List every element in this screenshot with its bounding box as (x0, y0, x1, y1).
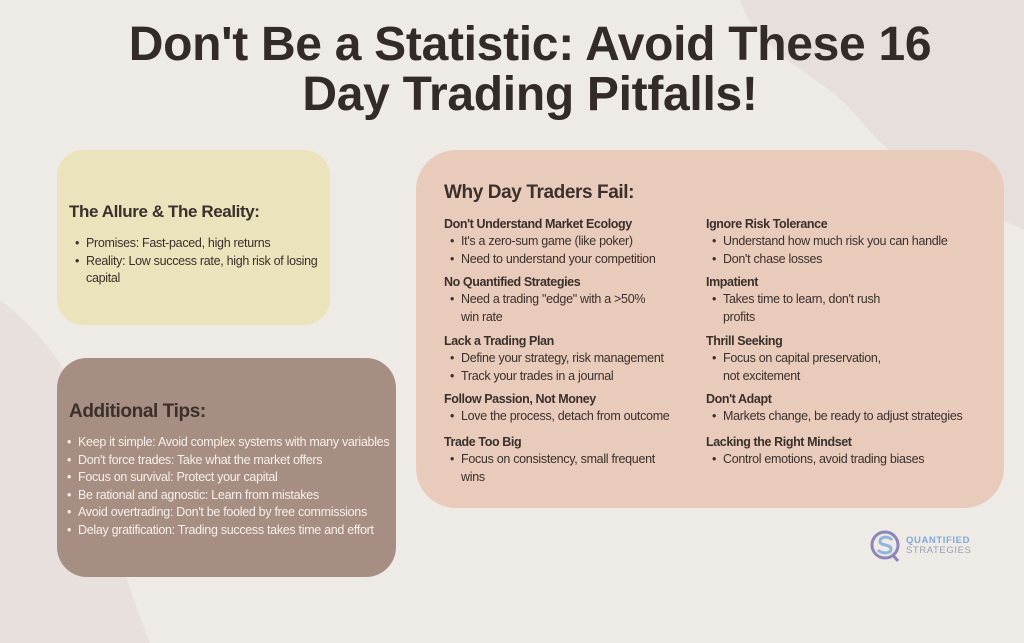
list: allure (76, 236, 317, 285)
panel: why day traders fail (416, 150, 1004, 508)
panel: why day traders fail: Takes time to learn, don't rush profits (723, 292, 880, 324)
column 1 (444, 217, 670, 484)
panel: why day traders fail: Don't Adapt (706, 392, 771, 406)
logo text: STRATEGIES (906, 545, 971, 556)
logo text: QUANTIFIED (906, 535, 970, 546)
panel: why day traders fail: Don't chase losses (723, 252, 822, 266)
panel: why day traders fail: Track your trades in a journal (461, 368, 613, 382)
panel: allure & reality (57, 150, 330, 325)
panel: why day traders fail: Lacking the Right Mindset (706, 435, 852, 449)
list: tips: Keep it simple: Avoid complex systems with many variables (78, 435, 389, 449)
title (129, 18, 931, 121)
list: tips: Be rational and agnostic: Learn from mistakes (78, 488, 319, 502)
heading: why fail: Why Day Traders Fail: (444, 182, 634, 203)
panel: why day traders fail: Understand how much risk you can handle (723, 234, 948, 248)
title: Don't Be a Statistic: Avoid These 16 (129, 18, 931, 71)
list: tips (68, 435, 390, 536)
list: allure: Promises: Fast-paced, high returns (86, 236, 270, 250)
list: tips: Focus on survival: Protect your capital (78, 470, 278, 484)
logo text (906, 535, 971, 556)
panel: why day traders fail: Trade Too Big (444, 435, 521, 449)
panel: why day traders fail: Define your strategy, risk management (461, 351, 664, 365)
list: tips: Delay gratification: Trading success takes time and effort (78, 522, 374, 536)
panel: why day traders fail: Impatient (706, 275, 758, 289)
title: Day Trading Pitfalls! (302, 68, 758, 121)
panel: why day traders fail: Follow Passion, Not Money (444, 392, 596, 406)
panel: why day traders fail: It's a zero-sum game (like poker) (461, 234, 633, 248)
panel: why day traders fail: Need a trading "edge" with a >50% win rate (461, 292, 645, 324)
list: allure: Reality: Low success rate, high risk of losing capital (86, 254, 317, 285)
icon: logo mark (870, 530, 900, 562)
panel: why day traders fail: Love the process, detach from outcome (461, 409, 669, 423)
heading: allure: The Allure & The Reality: (69, 202, 260, 221)
column 2 (706, 217, 962, 466)
logo (870, 530, 971, 562)
panel: why day traders fail: Markets change, be ready to adjust strategies (723, 409, 962, 423)
panel: why day traders fail: Thrill Seeking (706, 334, 782, 348)
panel: why day traders fail: Need to understand your competition (461, 252, 656, 266)
panel: why day traders fail: Focus on consistency, small frequent wins (461, 452, 655, 484)
panel: why day traders fail: Ignore Risk Tolerance (706, 217, 827, 231)
panel: why day traders fail: Lack a Trading Plan (444, 334, 554, 348)
list: tips: Don't force trades: Take what the market offers (78, 452, 322, 466)
panel: why day traders fail: No Quantified Strategies (444, 275, 580, 289)
heading: tips: Additional Tips: (69, 401, 206, 422)
panel: why day traders fail: Control emotions, avoid trading biases (723, 452, 924, 466)
panel: additional tips (57, 358, 396, 577)
panel: why day traders fail: Focus on capital preservation, not excitement (723, 351, 881, 382)
panel: why day traders fail: Don't Understand Market Ecology (444, 217, 632, 231)
list: tips: Avoid overtrading: Don't be fooled by free commissions (78, 505, 367, 519)
